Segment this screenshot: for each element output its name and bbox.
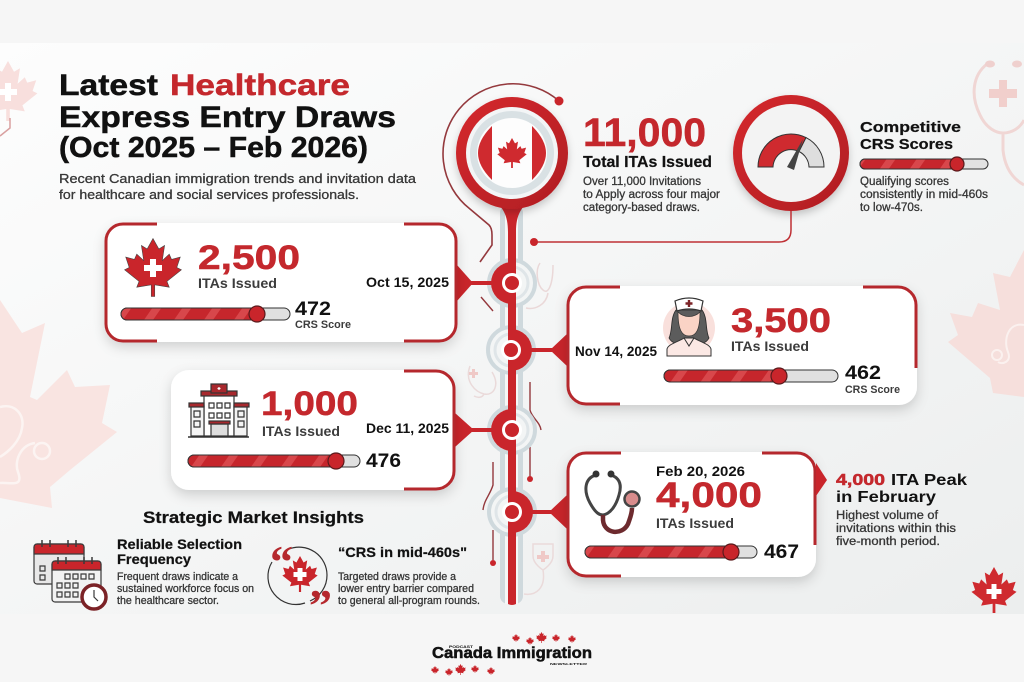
panel: Oct 15 draw: 472 — [295, 299, 331, 320]
insight: CRS in mid-460s: lower entry barrier compared — [338, 583, 474, 595]
panel: Feb 20 draw: 4,000 — [656, 476, 762, 515]
slider: CRS 467 — [585, 544, 757, 560]
icon: calendars and clock — [34, 540, 106, 609]
icon: maple leaf with cross — [125, 238, 181, 296]
icon: Canadian flag badge — [456, 97, 568, 209]
timeline node: Nov 14 — [488, 325, 568, 375]
icon: nurse — [663, 298, 715, 356]
panel: Nov 14 draw: 462 — [845, 363, 881, 384]
slider: CRS 462 — [664, 368, 838, 384]
icon: corner maple leaf — [971, 567, 1017, 613]
stat: total ITAs: Total ITAs Issued — [583, 154, 712, 171]
panel: Oct 15 draw — [105, 223, 457, 342]
insight: CRS in mid-460s — [338, 544, 480, 607]
insight: reliable selection frequency: Frequency — [117, 551, 191, 567]
stat: competitive CRS scores: Qualifying scores — [860, 176, 949, 188]
callout: February peak: Highest volume of — [836, 510, 939, 522]
panel: Feb 20 draw: ITAs Issued — [656, 515, 734, 531]
panel: Nov 14 draw: ITAs Issued — [731, 338, 809, 354]
panel: Dec 11 draw — [171, 370, 455, 490]
icon: maple leaf in quotation marks: “ — [270, 536, 293, 587]
title: Express Entry Draws — [59, 101, 396, 134]
slider: CRS 472 — [121, 306, 290, 322]
callout: February peak — [836, 472, 967, 548]
insight: CRS in mid-460s: “CRS in mid-460s" — [338, 544, 467, 560]
icon: hospital — [188, 384, 249, 437]
title: Latest — [59, 69, 158, 102]
subtitle: Recent Canadian immigration trends and invitation data — [59, 171, 417, 186]
callout: February peak: 4,000 — [836, 472, 885, 489]
panel: Oct 15 draw: 2,500 — [198, 239, 300, 277]
panel: Dec 11 draw: 1,000 — [261, 385, 358, 423]
callout: February peak: ITA Peak — [891, 472, 967, 489]
panel: Feb 20 draw: 467 — [764, 542, 799, 563]
stat: total ITAs: category-based draws. — [583, 202, 700, 214]
callout: February peak: in February — [836, 489, 936, 506]
stat: competitive CRS scores: to low-470s. — [860, 202, 923, 214]
subtitle — [59, 171, 417, 202]
title: Healthcare — [170, 69, 350, 102]
slider: CRS 476 — [188, 453, 360, 469]
insight: reliable selection frequency: the healthcare sector. — [117, 595, 219, 607]
icon: CRS gauge badge — [530, 95, 849, 246]
stat: competitive CRS scores — [860, 119, 988, 214]
logo: Canada Immigration: NEWSLETTER — [550, 662, 588, 666]
stat: competitive CRS scores: consistently in mid-460s — [860, 189, 988, 201]
panel: Nov 14 draw: Nov 14, 2025 — [575, 344, 657, 359]
panel: Dec 11 draw: ITAs Issued — [262, 423, 340, 439]
panel: Feb 20 draw: Feb 20, 2026 — [656, 463, 745, 479]
timeline node: Dec 11 — [455, 405, 535, 455]
stat: total ITAs: to Apply across four major — [583, 189, 720, 201]
stat: total ITAs: 11,000 — [583, 111, 706, 155]
insight: reliable selection frequency — [117, 536, 254, 607]
logo: Canada Immigration: PODCAST — [449, 645, 474, 649]
panel: Nov 14 draw — [567, 286, 917, 405]
stat: total ITAs — [583, 111, 720, 214]
insight: reliable selection frequency: sustained workforce focus on — [117, 583, 254, 595]
title — [59, 69, 396, 164]
icon: maple leaf in quotation marks — [268, 536, 332, 631]
panel: Oct 15 draw: ITAs Issued — [198, 275, 277, 291]
panel: Nov 14 draw: CRS Score — [845, 384, 900, 396]
panel: Oct 15 draw: CRS Score — [295, 319, 351, 331]
insight: CRS in mid-460s: to general all-program rounds. — [338, 595, 480, 607]
panel: Oct 15 draw: Oct 15, 2025 — [366, 275, 450, 290]
timeline spine — [443, 84, 564, 605]
callout: February peak: five-month period. — [836, 536, 940, 548]
subtitle: for healthcare and social services professionals. — [59, 187, 359, 202]
icon: stethoscope — [586, 470, 640, 532]
heading: strategic market insights: Strategic Market Insights — [143, 509, 364, 527]
panel: Dec 11 draw: Dec 11, 2025 — [366, 421, 450, 436]
timeline node: Feb 20 — [489, 487, 567, 537]
panel: Dec 11 draw: 476 — [366, 451, 401, 472]
panel: Nov 14 draw: 3,500 — [731, 302, 831, 340]
background decoration: pale leaves and stethoscopes — [0, 60, 1024, 594]
timeline node: Oct 15 — [457, 258, 535, 308]
panel: Feb 20 draw — [567, 452, 827, 577]
icon: maple leaf in quotation marks: ” — [309, 580, 332, 631]
callout: February peak: invitations within this — [836, 523, 956, 535]
stat: competitive CRS scores: CRS Scores — [860, 136, 953, 153]
stat: competitive CRS scores: Competitive — [860, 119, 961, 136]
insight: CRS in mid-460s: Targeted draws provide a — [338, 571, 457, 583]
title: (Oct 2025 – Feb 2026) — [59, 132, 368, 164]
insight: reliable selection frequency: Reliable Selection — [117, 536, 242, 552]
logo: Canada Immigration — [431, 632, 592, 676]
logo: Canada Immigration: Canada Immigration — [432, 645, 592, 662]
stat: total ITAs: Over 11,000 Invitations — [583, 176, 701, 188]
insight: reliable selection frequency: Frequent draws indicate a — [117, 571, 239, 583]
